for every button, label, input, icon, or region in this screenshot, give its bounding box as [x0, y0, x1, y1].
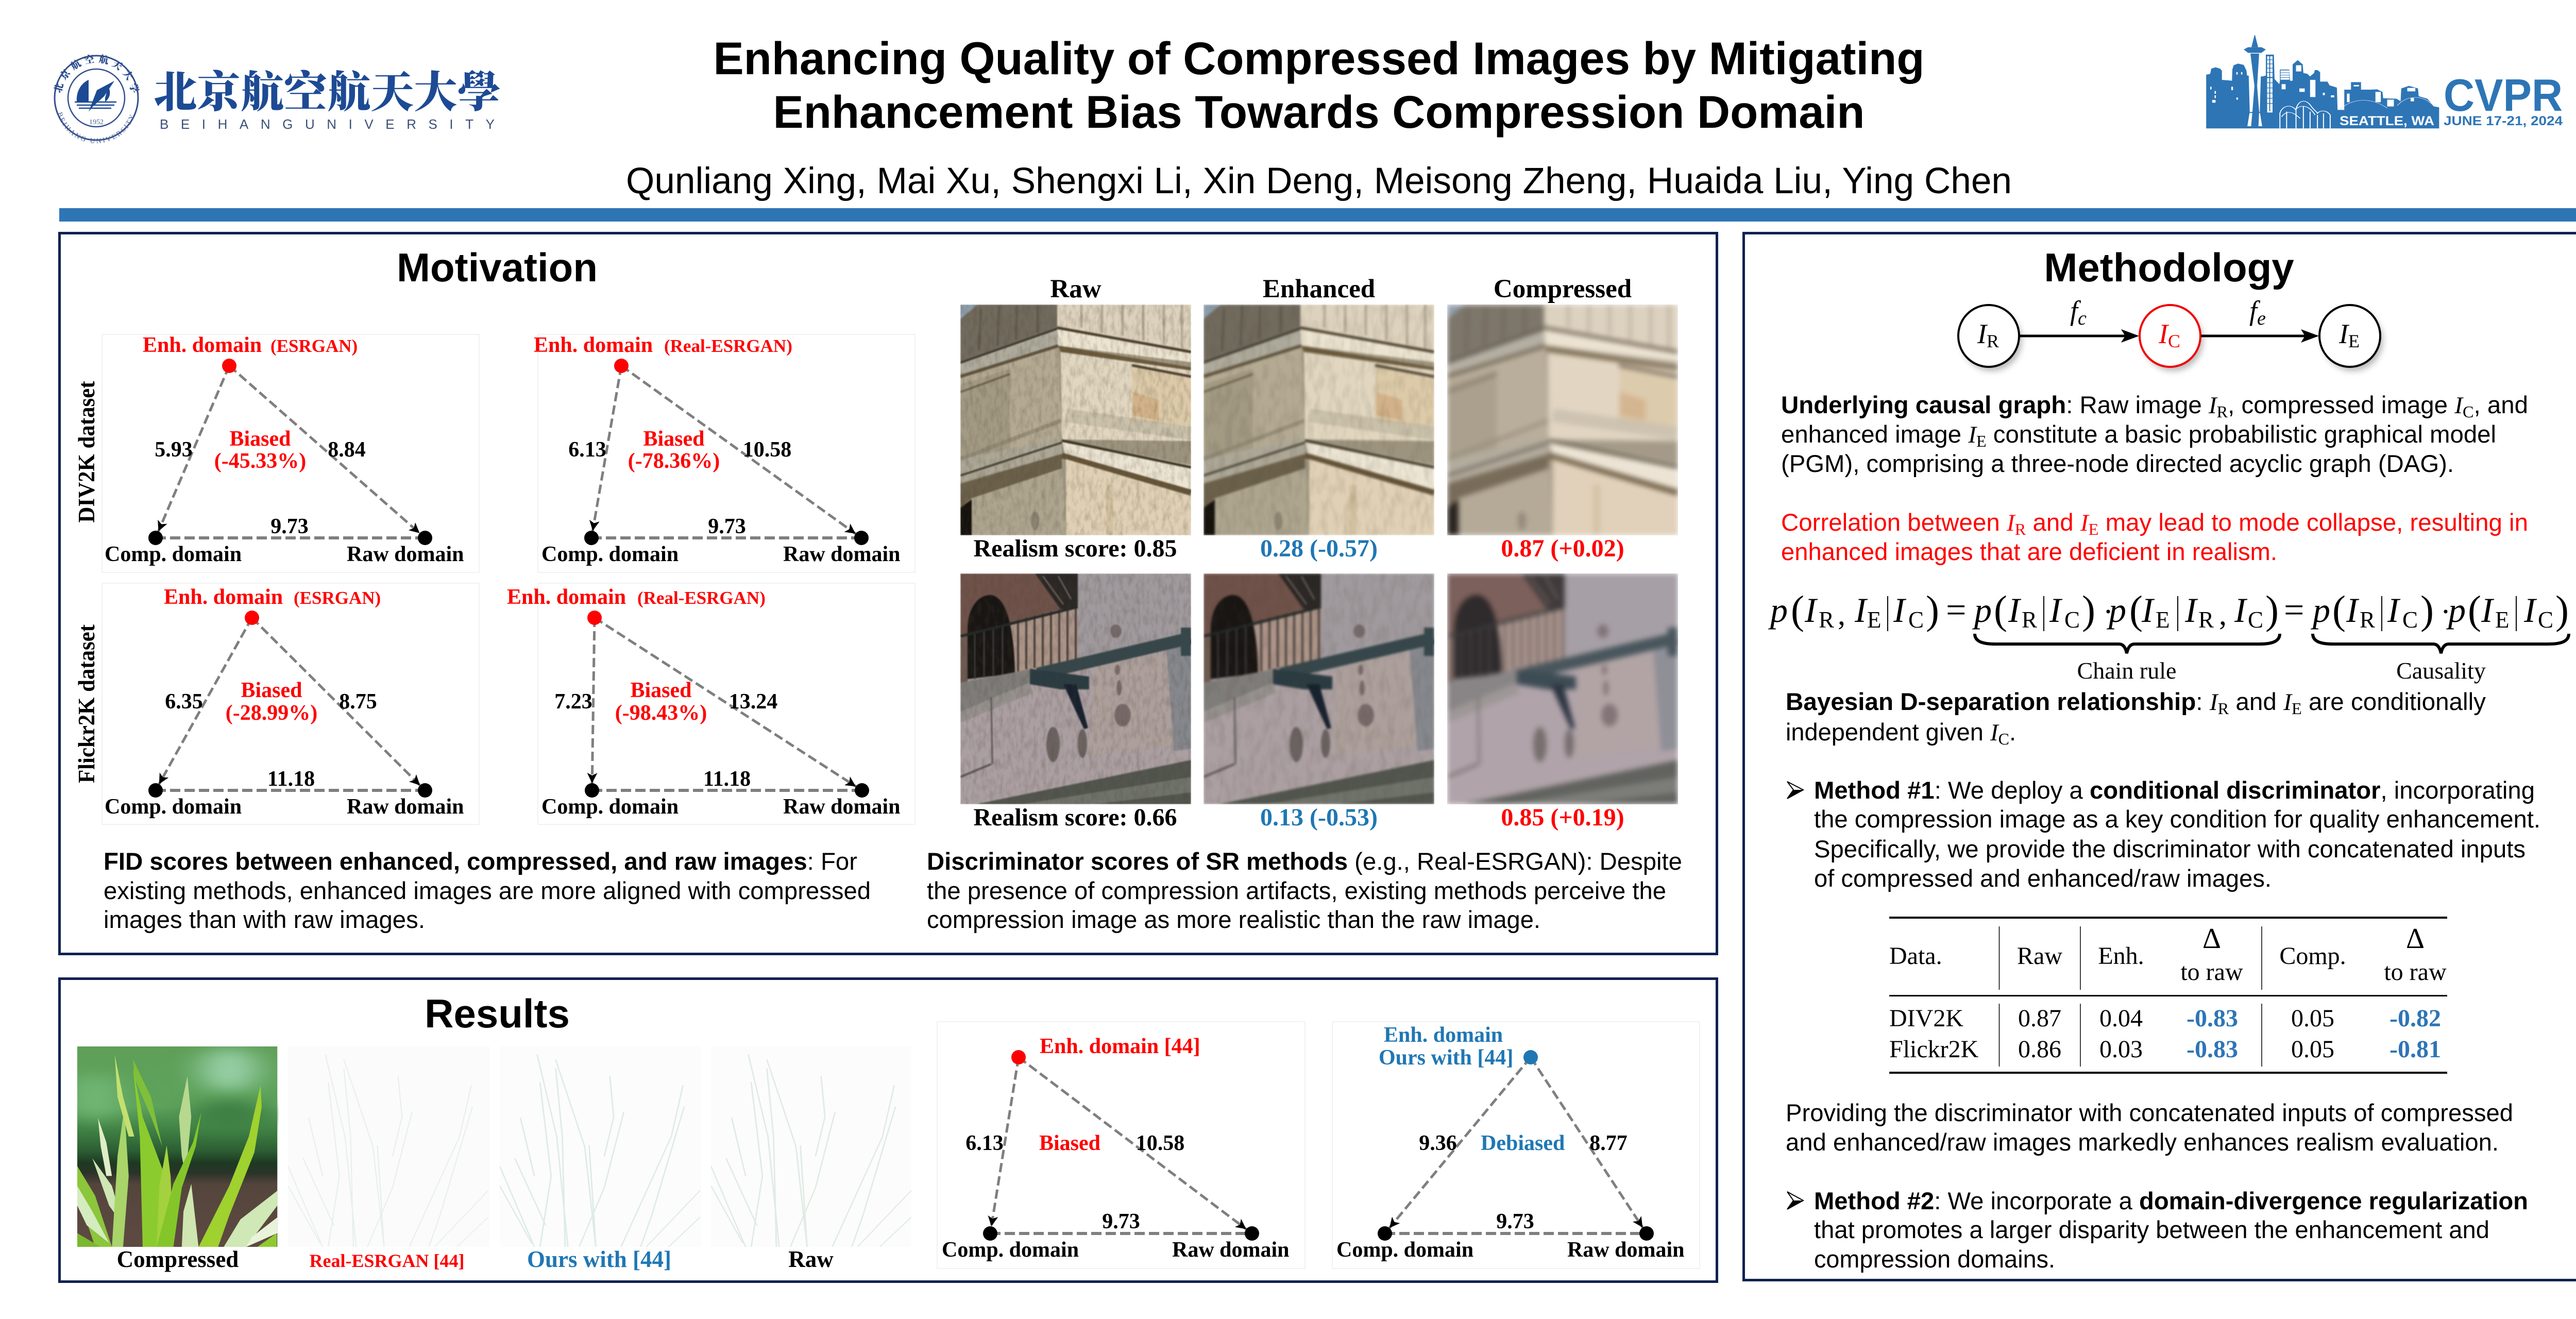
- scores row 1: 0.87 (+0.02): [1501, 535, 1624, 562]
- causal graph diagram: c: [2078, 308, 2087, 329]
- image: colosseum raw: [960, 573, 1191, 804]
- image labels: Ours with [44]: [527, 1246, 671, 1272]
- logo: CVPR Seattle: [2206, 35, 2563, 128]
- equation: p: [2311, 590, 2330, 630]
- chart: Flickr2K ESRGAN triangle: Enh. domain: [164, 585, 283, 609]
- table: realism scores: -0.83: [2187, 1036, 2238, 1063]
- caption: FID scores: existing methods, enhanced images are more aligned with compressed: [104, 877, 871, 904]
- chart: DIV2K Real-ESRGAN triangle: (-78.36%): [628, 449, 720, 473]
- equation: E: [2495, 607, 2509, 633]
- equation: I: [2346, 590, 2360, 630]
- chart: DIV2K ESRGAN triangle: 5.93: [155, 438, 193, 462]
- chart: DIV2K ESRGAN triangle: 9.73: [270, 515, 309, 538]
- label: Flickr2K dataset: Flickr2K dataset: [74, 624, 99, 783]
- equation: I: [2141, 590, 2155, 630]
- panel: Results: [60, 979, 1717, 1282]
- text: Bayesian D-separation: .: [2009, 718, 2016, 746]
- causal graph diagram: [1958, 295, 2383, 371]
- chart: DIV2K ESRGAN triangle: Biased: [229, 427, 291, 451]
- icon: university seal: BEIHANG UNIVERSITY: [58, 112, 134, 143]
- logo text: CVPR: CVPR: [2444, 70, 2563, 121]
- text: Method #1: [1787, 776, 2540, 892]
- text: Method #1: Specifically, we provide the discriminator with concatenated inputs: [1814, 835, 2526, 863]
- equation: R: [2198, 607, 2214, 633]
- text: red correlation note: [1781, 509, 2528, 565]
- equation: I: [1804, 590, 1818, 630]
- text: red correlation note: E: [2089, 520, 2098, 538]
- equation: =: [2284, 590, 2304, 630]
- chart: debiased triangle: Comp. domain: [1336, 1238, 1473, 1262]
- chart: Flickr2K ESRGAN triangle: Biased: [241, 679, 302, 702]
- causal graph diagram: R: [1987, 331, 1999, 351]
- header bar: [59, 208, 2576, 222]
- image: colosseum enhanced: [1204, 573, 1434, 804]
- text: Bayesian D-separation: and: [2229, 688, 2283, 715]
- text: Method #2: that promotes a larger disparity between the enhancement and: [1814, 1216, 2489, 1243]
- equation: ): [2555, 587, 2569, 632]
- chart: DIV2K ESRGAN triangle: Comp. domain: [105, 543, 242, 566]
- text: underlying causal graph: E: [1976, 432, 1987, 450]
- table: realism scores: to raw: [2384, 958, 2447, 986]
- text: underlying causal graph: (PGM), comprising a three-node directed acyclic graph (DAG).: [1781, 450, 2454, 477]
- equation: I: [2387, 590, 2401, 630]
- chart: DIV2K Real-ESRGAN triangle: Enh. domain: [534, 333, 653, 357]
- chart: DIV2K ESRGAN triangle: Enh. domain: [143, 333, 262, 357]
- equation: R: [1819, 607, 1834, 633]
- icon: bullet arrow: [1787, 1192, 1803, 1209]
- equation: ,: [1838, 597, 1845, 631]
- causal graph diagram: I: [2338, 318, 2350, 349]
- chart: DIV2K Real-ESRGAN triangle: 6.13: [568, 438, 606, 462]
- chart: biased triangle: 6.13: [965, 1131, 1004, 1155]
- image labels: [117, 1246, 834, 1272]
- equation: p: [2107, 590, 2126, 630]
- text: underlying causal graph: R: [2217, 402, 2228, 421]
- image: stone compressed: [1447, 305, 1678, 535]
- text: underlying causal graph: enhanced image I: [1781, 420, 1976, 448]
- column headers: Raw, Enhanced, Compressed: Enhanced: [1263, 275, 1375, 303]
- panel: Methodology: [1743, 233, 2576, 1280]
- chart: debiased triangle: Ours with [44]: [1379, 1046, 1513, 1070]
- equation: C: [1908, 607, 1924, 633]
- table: realism scores: 0.04: [2099, 1005, 2143, 1032]
- column headers: Raw, Enhanced, Compressed: [1050, 275, 1632, 303]
- label: DIV2K dataset: DIV2K dataset: [74, 381, 99, 522]
- causal graph diagram: f: [2070, 295, 2078, 326]
- text: Bayesian D-separation: I: [2283, 689, 2293, 716]
- image labels: Compressed: [117, 1246, 239, 1272]
- icon: bullet arrow: [1787, 782, 1803, 799]
- equation: I: [2049, 590, 2063, 630]
- brace: causality: [2313, 634, 2569, 653]
- chart: DIV2K ESRGAN triangle: [102, 333, 479, 572]
- icon: university seal: [54, 54, 139, 143]
- equation: ): [2082, 587, 2095, 632]
- chart: biased triangle: Raw domain: [1172, 1238, 1290, 1262]
- chart: biased triangle: Enh. domain [44]: [1040, 1035, 1200, 1058]
- caption: Discriminator scores: the presence of compression artifacts, existing methods perceive the: [927, 877, 1666, 904]
- text: providing the discriminator: [1786, 1099, 2513, 1156]
- equation: R: [2360, 607, 2375, 633]
- causal graph diagram: C: [2168, 331, 2180, 351]
- image: stone enhanced: [1204, 305, 1434, 535]
- text: underlying causal graph: [1781, 391, 2528, 477]
- chart: DIV2K Real-ESRGAN triangle: (Real-ESRGAN): [664, 336, 792, 356]
- caption: FID scores: [104, 848, 871, 933]
- chart: biased triangle: [937, 1022, 1305, 1269]
- image labels: Real-ESRGAN [44]: [310, 1250, 464, 1271]
- causal graph diagram: e: [2257, 308, 2266, 329]
- chart: biased triangle: Comp. domain: [942, 1238, 1079, 1262]
- chart: Flickr2K ESRGAN triangle: 6.35: [165, 690, 203, 714]
- equation: C: [2402, 607, 2418, 633]
- title: Enhancing Quality of Compressed Images by Mitigating: [713, 32, 1925, 84]
- chart: DIV2K ESRGAN triangle: Raw domain: [347, 543, 464, 566]
- equation: (: [1791, 587, 1804, 632]
- chart: Flickr2K ESRGAN triangle: [102, 583, 479, 824]
- text: Bayesian D-separation: E: [2292, 699, 2302, 718]
- equation: E: [1867, 607, 1882, 633]
- equation: ·: [2103, 595, 2113, 629]
- chart: DIV2K Real-ESRGAN triangle: Biased: [643, 427, 705, 451]
- equation: I: [1854, 590, 1868, 630]
- image labels: Raw: [788, 1246, 834, 1272]
- equation: C: [2538, 607, 2553, 633]
- image: edge map ours: [500, 1046, 701, 1247]
- image: colosseum compressed: [1447, 573, 1678, 804]
- table: realism scores: 0.05: [2291, 1036, 2334, 1063]
- scores row 2: [973, 804, 1624, 831]
- chart: Flickr2K ESRGAN triangle: 8.75: [339, 690, 377, 714]
- causal graph diagram: E: [2348, 331, 2360, 351]
- table: realism scores: 0.86: [2018, 1036, 2061, 1063]
- text: red correlation note: enhanced images that are deficient in realism.: [1781, 538, 2277, 565]
- chart: Flickr2K ESRGAN triangle: 11.18: [267, 767, 315, 791]
- heading: Results: Results: [425, 991, 570, 1036]
- chart: Flickr2K Real-ESRGAN triangle: 7.23: [554, 690, 592, 714]
- caption: Discriminator scores: [927, 848, 1682, 933]
- text: Method #2: compression domains.: [1814, 1245, 2055, 1273]
- label: causality: Causality: [2396, 657, 2486, 684]
- equation: ,: [2219, 597, 2227, 631]
- title: [713, 32, 1925, 138]
- logo wordmark: English: BEIHANGUNIVERSITY: [160, 116, 495, 132]
- equation: I: [1893, 590, 1907, 630]
- equation: I: [2234, 590, 2248, 630]
- equation: ): [2420, 587, 2434, 632]
- chart: DIV2K Real-ESRGAN triangle: Comp. domain: [541, 543, 679, 566]
- equation: (: [2332, 587, 2346, 632]
- equation: E: [2156, 607, 2170, 633]
- chart: Flickr2K Real-ESRGAN triangle: 13.24: [729, 690, 777, 714]
- equation: ): [2265, 587, 2279, 632]
- chart: Flickr2K ESRGAN triangle: Comp. domain: [105, 795, 242, 819]
- text: Bayesian D-separation: C: [1998, 730, 2009, 748]
- text: underlying causal graph: , and: [2474, 391, 2528, 418]
- equation: =: [1946, 590, 1966, 630]
- scores row 1: [973, 535, 1624, 562]
- table: realism scores: to raw: [2180, 958, 2243, 986]
- chart: Flickr2K Real-ESRGAN triangle: (-98.43%): [615, 701, 707, 725]
- chart: debiased triangle: [1332, 1022, 1700, 1269]
- column headers: Raw, Enhanced, Compressed: Raw: [1050, 275, 1101, 303]
- table: realism scores: -0.81: [2389, 1036, 2441, 1063]
- chart: debiased triangle: Raw domain: [1567, 1238, 1685, 1262]
- chart: Flickr2K Real-ESRGAN triangle: Enh. domain: [507, 585, 626, 609]
- icon: university seal: 北京航空航天大学: [54, 54, 139, 93]
- chart: Flickr2K ESRGAN triangle: Raw domain: [347, 795, 464, 819]
- chart: debiased triangle: 8.77: [1589, 1131, 1628, 1155]
- equation: I: [2008, 590, 2022, 630]
- caption: FID scores: images than with raw images.: [104, 906, 425, 933]
- panel: Motivation: [60, 233, 1717, 954]
- equation: ): [1926, 587, 1939, 632]
- text: underlying causal graph: constitute a basic probabilistic graphical model: [1987, 420, 2496, 448]
- chart: Flickr2K Real-ESRGAN triangle: (Real-ESRGAN): [637, 588, 766, 608]
- scores row 2: 0.85 (+0.19): [1501, 804, 1624, 831]
- chart: debiased triangle: 9.73: [1496, 1210, 1534, 1233]
- text: Method #2: [1787, 1187, 2528, 1273]
- caption: FID scores: FID scores between enhanced, compressed, and raw images: For: [104, 848, 857, 875]
- equation: C: [2248, 607, 2263, 633]
- text: providing the discriminator: and enhanced/raw images markedly enhances realism evaluation.: [1786, 1128, 2499, 1156]
- icon: Seattle skyline: [2206, 35, 2439, 128]
- scores row 1: 0.28 (-0.57): [1260, 535, 1378, 562]
- title: Enhancement Bias Towards Compression Domain: [773, 86, 1865, 138]
- image: edge map raw: [711, 1046, 911, 1247]
- scores row 2: 0.13 (-0.53): [1260, 804, 1378, 831]
- text: underlying causal graph: I: [2454, 392, 2464, 419]
- table: realism scores: Δ: [2202, 923, 2221, 955]
- chart: Flickr2K Real-ESRGAN triangle: Biased: [630, 679, 692, 702]
- chart: Flickr2K ESRGAN triangle: (-28.99%): [226, 701, 317, 725]
- chart: Flickr2K Real-ESRGAN triangle: Raw domain: [783, 795, 901, 819]
- chart: Flickr2K Real-ESRGAN triangle: Comp. domain: [541, 795, 679, 819]
- chart: DIV2K Real-ESRGAN triangle: 9.73: [708, 515, 746, 538]
- table: realism scores: 0.87: [2018, 1005, 2061, 1032]
- equation: p: [1768, 590, 1788, 630]
- text: providing the discriminator: Providing the discriminator with concatenated inputs of compressed: [1786, 1099, 2513, 1126]
- chart: DIV2K ESRGAN triangle: (-45.33%): [214, 449, 306, 473]
- image: edge map Real-ESRGAN: [288, 1046, 489, 1247]
- equation: C: [2064, 607, 2080, 633]
- image: compressed grass: [73, 1046, 277, 1247]
- causal graph diagram: f: [2249, 295, 2257, 326]
- logo: Beihang University: [54, 54, 501, 143]
- equation: p: [1972, 590, 1992, 630]
- text: Method #2: Method #2: We incorporate a domain-divergence regularization: [1814, 1187, 2528, 1214]
- text: underlying causal graph: , compressed image: [2228, 391, 2454, 418]
- chart: biased triangle: Biased: [1039, 1131, 1100, 1155]
- text: Bayesian D-separation: are conditionally: [2302, 688, 2486, 715]
- text: red correlation note: R: [2015, 520, 2026, 538]
- image: stone raw: [960, 305, 1191, 535]
- table: realism scores: 0.05: [2291, 1005, 2334, 1032]
- authors: Qunliang Xing, Mai Xu, Shengxi Li, Xin Deng, Meisong Zheng, Huaida Liu, Ying Chen: [626, 161, 2012, 201]
- text: Bayesian D-separation: [1786, 688, 2486, 748]
- equation: I: [2523, 590, 2537, 630]
- text: Bayesian D-separation: independent given I: [1786, 718, 1998, 746]
- equation: R: [2022, 607, 2037, 633]
- equation: ·: [2441, 595, 2451, 629]
- logo wordmark: Chinese: 北京航空航天大學: [154, 69, 501, 117]
- table: realism scores: Comp.: [2279, 942, 2346, 970]
- equation: I: [2481, 590, 2495, 630]
- chart: debiased triangle: Enh. domain: [1384, 1023, 1503, 1047]
- table: realism scores: Raw: [2017, 942, 2062, 970]
- chart: Flickr2K Real-ESRGAN triangle: [507, 583, 915, 824]
- table: realism scores: Δ: [2406, 923, 2425, 955]
- heading: Methodology: Methodology: [2044, 245, 2294, 290]
- equation: (: [2129, 587, 2143, 632]
- scores row 1: Realism score: 0.85: [973, 535, 1177, 562]
- table: realism scores: Flickr2K: [1889, 1036, 1979, 1063]
- chart: Flickr2K Real-ESRGAN triangle: 11.18: [703, 767, 751, 791]
- equation: p: [2446, 590, 2466, 630]
- scores row 2: Realism score: 0.66: [973, 804, 1177, 831]
- chart: biased triangle: 10.58: [1136, 1131, 1184, 1155]
- table: realism scores: -0.82: [2389, 1005, 2441, 1032]
- caption: Discriminator scores: compression image as more realistic than the raw image.: [927, 906, 1540, 933]
- text: red correlation note: Correlation between I: [1781, 509, 2015, 536]
- chart: biased triangle: 9.73: [1102, 1210, 1140, 1233]
- column headers: Raw, Enhanced, Compressed: Compressed: [1494, 275, 1632, 303]
- text: Method #1: Method #1: We deploy a conditional discriminator, incorporating: [1814, 776, 2535, 804]
- equation: (: [2468, 587, 2481, 632]
- equation: [1768, 587, 2569, 684]
- chart: DIV2K Real-ESRGAN triangle: Raw domain: [783, 543, 901, 566]
- chart: DIV2K Real-ESRGAN triangle: [534, 333, 915, 572]
- icon: university seal: 1952: [89, 119, 104, 126]
- text: underlying causal graph: Underlying causal graph: Raw image I: [1781, 391, 2217, 419]
- caption: Discriminator scores: Discriminator scores of SR methods (e.g., Real-ESRGAN): Despite: [927, 848, 1682, 875]
- text: red correlation note: I: [2080, 510, 2090, 536]
- table: realism scores: Enh.: [2098, 942, 2144, 970]
- chart: debiased triangle: 9.36: [1419, 1131, 1457, 1155]
- brace: chain rule: [1975, 634, 2280, 653]
- table: realism scores: Data.: [1889, 942, 1942, 970]
- text: Bayesian D-separation: R: [2218, 699, 2229, 718]
- table: realism scores: [1889, 917, 2447, 1074]
- text: Method #1: of compressed and enhanced/raw images.: [1814, 865, 2272, 892]
- logo text: date: JUNE 17-21, 2024: [2444, 114, 2563, 128]
- heading: Motivation: Motivation: [397, 245, 598, 290]
- equation: I: [2184, 590, 2198, 630]
- text: underlying causal graph: C: [2463, 402, 2474, 421]
- table: realism scores: DIV2K: [1889, 1005, 1963, 1032]
- logo text: SEATTLE, WA: SEATTLE, WA: [2340, 114, 2434, 128]
- table: realism scores: 0.03: [2099, 1036, 2143, 1063]
- causal graph diagram: I: [2158, 318, 2170, 349]
- table: realism scores: -0.83: [2187, 1005, 2238, 1032]
- chart: DIV2K Real-ESRGAN triangle: 10.58: [743, 438, 791, 462]
- causal graph diagram: I: [1977, 318, 1988, 349]
- chart: Flickr2K ESRGAN triangle: (ESRGAN): [294, 588, 381, 608]
- text: red correlation note: and: [2026, 509, 2080, 536]
- equation: (: [1994, 587, 2007, 632]
- text: Bayesian D-separation: Bayesian D-separation relationship: I: [1786, 688, 2217, 716]
- text: red correlation note: may lead to mode collapse, resulting in: [2098, 509, 2528, 536]
- text: Method #1: the compression image as a key condition for quality enhancement.: [1814, 805, 2540, 833]
- chart: DIV2K ESRGAN triangle: 8.84: [328, 438, 366, 462]
- label: chain rule: Chain rule: [2077, 657, 2176, 684]
- chart: DIV2K ESRGAN triangle: (ESRGAN): [270, 336, 358, 356]
- chart: debiased triangle: Debiased: [1481, 1131, 1565, 1155]
